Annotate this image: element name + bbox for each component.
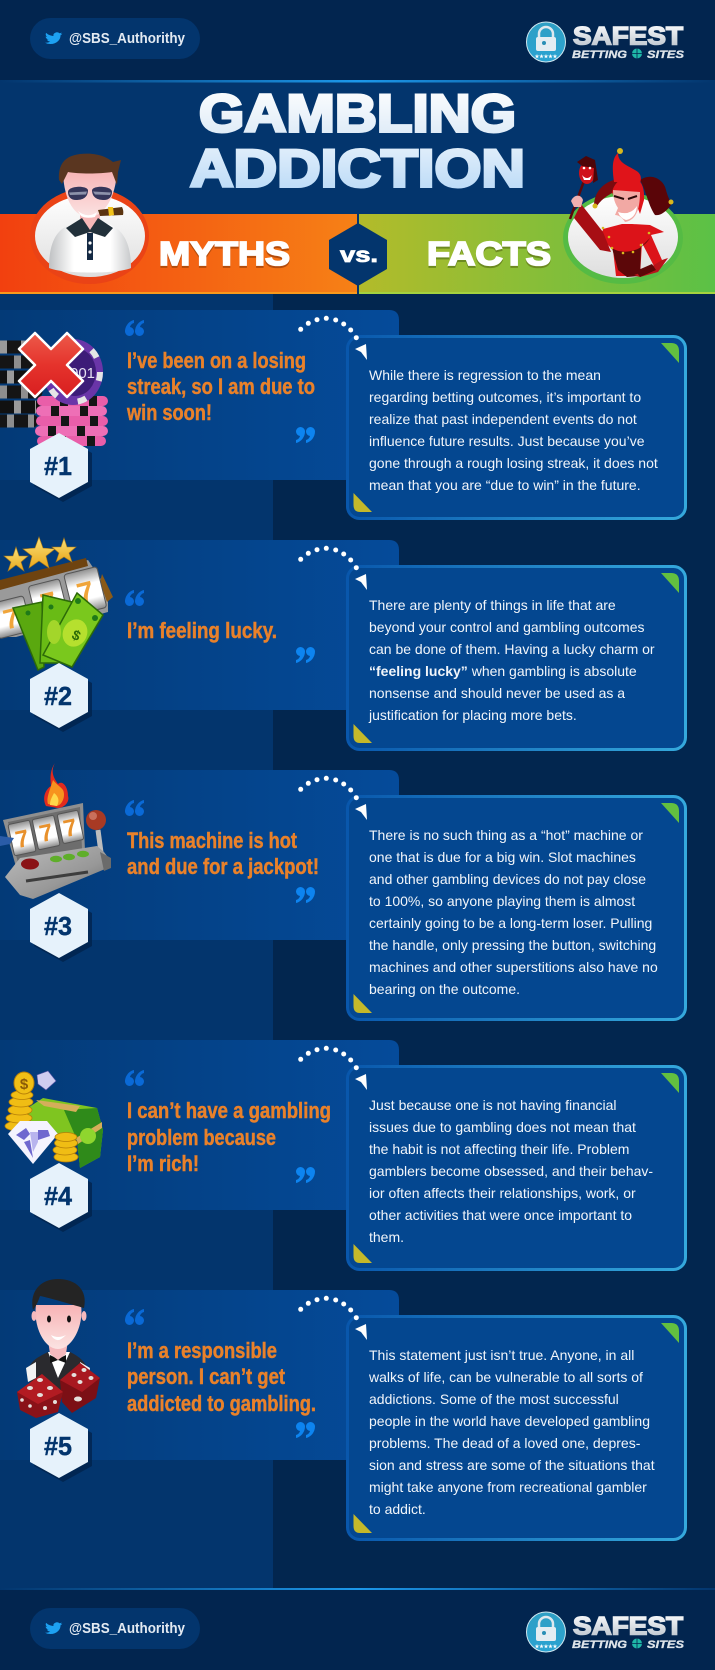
icon: stacked chips with red X: 001: [70, 365, 95, 382]
myth 1 section: [0, 310, 686, 518]
title: [190, 84, 525, 198]
icon: money, coins and diamonds: $: [20, 1076, 29, 1093]
facts label: FACTS: [427, 237, 551, 274]
fact box 4: gamblers become obsessed, and their behav-: [369, 1163, 653, 1179]
hexagon badge #5: [30, 1413, 92, 1482]
fact box 1: gone through a rough losing streak, it does not: [369, 455, 658, 471]
vs hexagon: vs.: [340, 244, 378, 267]
myth 2 quote: [125, 590, 315, 663]
hexagon badge #4: [30, 1163, 92, 1232]
icon: slot reels, stars and cash: 7: [0, 602, 23, 636]
hexagon badge #3: #3: [44, 911, 72, 941]
vs hexagon: [329, 223, 387, 286]
myth 4 quote: I can’t have a gambling: [127, 1098, 331, 1123]
logo: Safest Betting Sites: [526, 22, 685, 62]
myth 2 quote: I’m feeling lucky.: [127, 618, 277, 643]
myth 1 quote: win soon!: [126, 400, 212, 425]
header rule: [0, 80, 715, 82]
fact box 2: There are plenty of things in life that are: [369, 597, 616, 613]
fact box 4: other activities that were once important to: [369, 1207, 632, 1223]
myth 4 quote: I’m rich!: [127, 1151, 199, 1176]
fact box 2: beyond your control and gambling outcomes: [369, 619, 645, 635]
fact box 3: to 100%, so anyone playing them is almost: [369, 893, 635, 909]
myth 5 quote: [125, 1309, 316, 1438]
panel: myth 5: [0, 1290, 399, 1460]
icon: slot machine with flame: 7: [13, 825, 32, 854]
hexagon badge #2: [30, 663, 92, 732]
fact box 1: While there is regression to the mean: [369, 367, 601, 383]
footer logo: Safest Betting Sites: SITES: [647, 1639, 685, 1651]
myth 1 quote: I’ve been on a losing: [127, 348, 306, 373]
fact box 4: ior often affects their relationships, work, or: [369, 1185, 636, 1201]
hexagon badge #3: [30, 893, 92, 962]
myth 5 quote: person. I can’t get: [127, 1364, 286, 1389]
myth 4 quote: [125, 1070, 331, 1183]
fact box 3: and other gambling devices do not pay close: [369, 871, 646, 887]
logo: Safest Betting Sites: SAFEST: [573, 22, 683, 50]
fact box 1: regarding betting outcomes, it’s important to: [369, 389, 641, 405]
icon: man with sunglasses and cigar: [30, 154, 149, 284]
myth 5 quote: I’m a responsible: [127, 1338, 277, 1363]
fact box 3: the handle, only pressing the button, switching: [369, 937, 656, 953]
myth 4 quote: problem because: [127, 1125, 276, 1150]
panel: myth 4: [0, 1040, 399, 1210]
fact box 5: sion and stress are some of the situations that: [369, 1457, 655, 1473]
fact box 5: people in the world have developed gambling: [369, 1413, 650, 1429]
myth 3 quote: [125, 800, 319, 903]
fact box 4: them.: [369, 1229, 404, 1245]
header bar: [0, 0, 715, 80]
fact box 5: to addict.: [369, 1501, 426, 1517]
hexagon badge #1: #1: [44, 451, 72, 481]
hexagon badge #4: #4: [44, 1181, 73, 1211]
icon: slot machine with flame: [0, 763, 111, 899]
fact box 3: certainly going to be a long-term loser. Pulling: [369, 915, 652, 931]
myth 1 quote: [125, 320, 315, 443]
twitter handle pill: @SBS_Authorithy: [69, 31, 185, 47]
myth 3 section: [0, 763, 686, 1020]
left background strip: [0, 82, 273, 1588]
icon: stacked chips with red X: [0, 333, 104, 441]
fact box 2: justification for placing more bets.: [368, 707, 577, 723]
hexagon badge #5: #5: [44, 1431, 72, 1461]
fact box 3: machines and other superstitions also have no: [369, 959, 658, 975]
footer logo: Safest Betting Sites: [526, 1612, 685, 1652]
fact box 4: the habit is not affecting their life. Problem: [369, 1141, 629, 1157]
footer bar: [0, 1590, 715, 1670]
myths vs facts band: [0, 214, 715, 294]
title: ADDICTION: [190, 140, 525, 198]
fact box 5: [298, 1296, 686, 1540]
fact box 2: nonsense and should never be used as a: [369, 685, 625, 701]
myth 4 section: [0, 1040, 686, 1270]
hexagon badge #2: #2: [44, 681, 72, 711]
twitter handle pill: [30, 18, 200, 59]
fact box 4: Just because one is not having financial: [369, 1097, 616, 1113]
fact box 2: can be done of them. Having a lucky charm or: [369, 641, 655, 657]
fact box 1: realize that past independent events do not: [369, 411, 637, 427]
facts label: FACTS: [427, 235, 551, 272]
icon: money, coins and diamonds: [5, 1071, 103, 1168]
icon: croupier with red dice: [17, 1279, 100, 1418]
logo: Safest Betting Sites: BETTING: [572, 49, 627, 61]
footer rule: [0, 1588, 715, 1590]
myth 3 quote: and due for a jackpot!: [127, 854, 319, 879]
fact box 5: might take anyone from recreational gambler: [369, 1479, 647, 1495]
fact box 3: There is no such thing as a “hot” machine or: [369, 827, 643, 843]
fact box 2: [298, 546, 686, 750]
panel: myth 1: [0, 310, 399, 480]
fact box 4: issues due to gambling does not mean that: [369, 1119, 636, 1135]
footer logo: Safest Betting Sites: BETTING: [572, 1639, 627, 1651]
myths label: MYTHS: [159, 237, 290, 274]
icon: slot machine with flame: 7: [61, 814, 80, 843]
icon: slot reels, stars and cash: 7: [74, 575, 98, 611]
title: GAMBLING: [199, 84, 516, 144]
fact box 1: [298, 316, 686, 518]
fact box 5: addictions. Some of the most successful: [369, 1391, 619, 1407]
footer logo: Safest Betting Sites: SAFEST: [573, 1612, 683, 1640]
panel: myth 3: [0, 770, 399, 940]
footer twitter handle pill: [30, 1608, 200, 1649]
fact box 5: This statement just isn’t true. Anyone, in all: [369, 1347, 634, 1363]
myth 2 section: [0, 537, 686, 750]
panel: myth 2: [0, 540, 399, 710]
myth 5 quote: addicted to gambling.: [127, 1391, 316, 1416]
icon: jester with sceptre: [563, 148, 683, 284]
icon: slot reels, stars and cash: 7: [37, 586, 60, 619]
hexagon badge #1: [30, 433, 92, 502]
myth 3 quote: This machine is hot: [127, 828, 298, 853]
icon: slot machine with flame: 7: [37, 819, 56, 848]
icon: slot reels, stars and cash: [0, 537, 113, 670]
fact box 5: walks of life, can be vulnerable to all sorts of: [368, 1369, 643, 1385]
fact box 1: influence future results. Just because you’ve: [369, 433, 645, 449]
myths label: MYTHS: [159, 235, 290, 272]
fact box 4: [298, 1046, 686, 1270]
fact box 2: “feeling lucky” when gambling is absolute: [369, 663, 637, 679]
fact box 1: mean that you are “due to win” in the future.: [369, 477, 641, 493]
icon: slot reels, stars and cash: $: [70, 626, 84, 644]
fact box 3: one that is due for a big win. Slot machines: [369, 849, 636, 865]
logo: Safest Betting Sites: SITES: [647, 49, 685, 61]
logo: Safest Betting Sites: ★★★★★: [535, 54, 558, 60]
footer logo: Safest Betting Sites: ★★★★★: [535, 1644, 558, 1650]
myth 5 section: [0, 1279, 686, 1540]
fact box 3: bearing on the outcome.: [369, 981, 520, 997]
fact box 3: [298, 776, 686, 1020]
fact box 5: problems. The dead of a loved one, depres-: [369, 1435, 641, 1451]
title band background: [0, 82, 715, 214]
footer twitter handle pill: @SBS_Authorithy: [69, 1621, 185, 1637]
myth 1 quote: streak, so I am due to: [127, 374, 315, 399]
